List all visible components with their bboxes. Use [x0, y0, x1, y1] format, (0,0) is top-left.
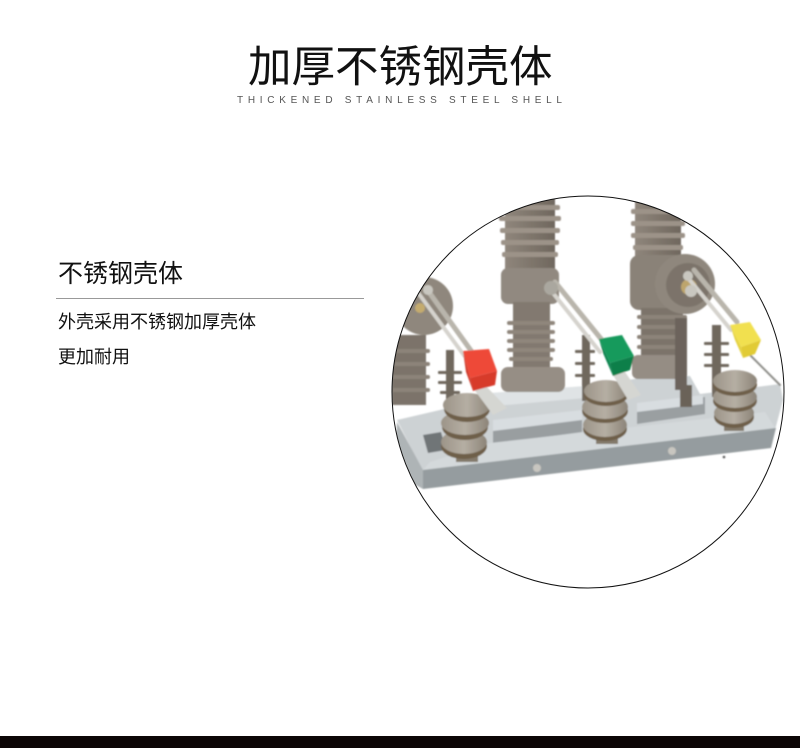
description text: 更加耐用: [58, 347, 130, 367]
description text: 外壳采用不锈钢加厚壳体: [58, 312, 256, 332]
insulator stack: red phase: [441, 385, 507, 462]
insulator: right column: [630, 198, 715, 390]
front base rail: [396, 422, 776, 490]
subtitle: THICKENED STAINLESS STEEL SHELL: [237, 95, 567, 106]
insulator stack: green phase: [581, 370, 630, 445]
title: 加厚不锈钢壳体: [248, 44, 552, 92]
bolts on arms: [423, 271, 697, 297]
insulator: centre column: [499, 198, 565, 392]
small lightning arresters: [438, 325, 729, 402]
insulator stack: yellow phase: [713, 370, 757, 431]
circular product photo: [392, 196, 784, 588]
circle outline: [392, 196, 784, 588]
description text: [58, 312, 256, 367]
heading rule: [56, 298, 364, 299]
section heading: 不锈钢壳体: [58, 260, 183, 288]
red handle: [463, 349, 497, 391]
back frame: [397, 376, 783, 472]
insulator: left column: [390, 277, 453, 405]
yellow handle: [730, 322, 761, 358]
switch arms: [419, 270, 780, 385]
bottom bar: [0, 736, 800, 748]
green handle: [599, 335, 634, 376]
